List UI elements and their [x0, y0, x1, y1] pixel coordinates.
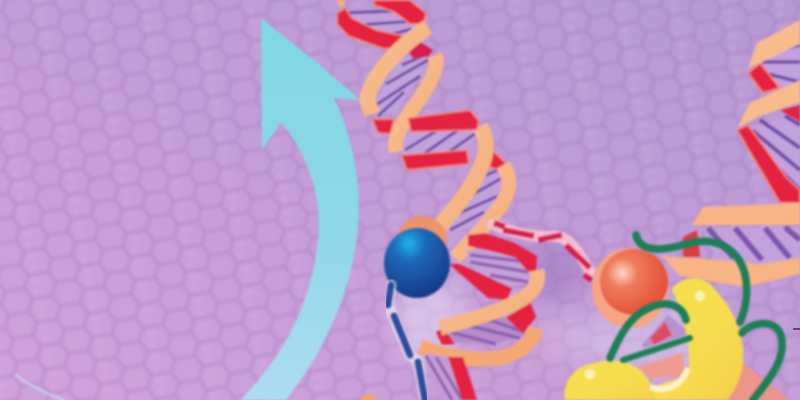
small strand under ball — [642, 315, 692, 348]
orange cap behind blue ball — [397, 216, 447, 264]
helix turn 3 — [401, 110, 506, 173]
arrow: curved cyan arrow — [15, 18, 360, 400]
helix turn 1 — [336, 0, 426, 49]
blue strand — [388, 285, 425, 400]
orange fragment at bottom edge — [361, 394, 375, 400]
small dark mark at right edge — [793, 328, 800, 330]
right DNA helix, upper — [737, 20, 800, 203]
single-stranded pink and red DNA strand — [488, 222, 594, 280]
helix turn 5 — [420, 233, 538, 359]
helix lower tail — [423, 353, 477, 400]
blue polymerase ball — [384, 228, 450, 298]
helix turn 2 — [367, 27, 436, 152]
glow around molecules — [394, 236, 720, 380]
left DNA helix — [336, 0, 538, 400]
yellow protein — [564, 278, 743, 400]
helix turn 4 — [440, 127, 509, 258]
green protein loops — [610, 235, 782, 400]
right DNA helix, lower — [662, 203, 800, 287]
orange-red ball — [592, 248, 668, 328]
salmon protein patches — [637, 353, 790, 400]
